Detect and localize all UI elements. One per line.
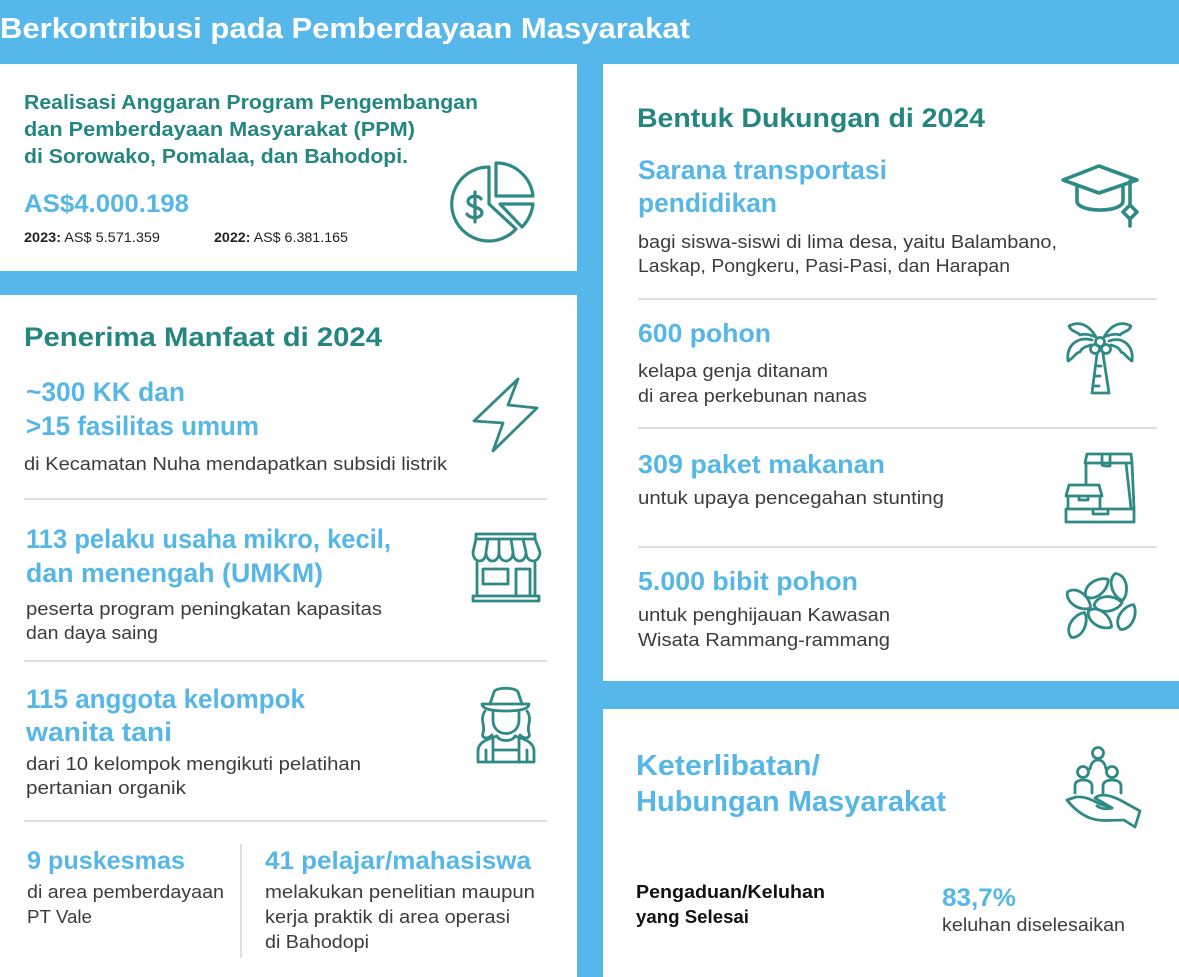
item: women farmer group: 115 anggota kelompok <box>26 684 306 714</box>
item: education transport: bagi siswa-siswi di lima desa, yaitu Balambano, <box>638 232 1057 252</box>
support heading: Bentuk Dukungan di 2024 <box>637 103 985 133</box>
icon: lightning bolt <box>474 379 537 451</box>
item: students research <box>265 847 535 952</box>
engagement heading: Keterlibatan/ <box>636 750 820 782</box>
icon: pie chart with dollar <box>452 163 533 241</box>
item: women farmer group: dari 10 kelompok mengikuti pelatihan <box>26 754 361 774</box>
item: coconut trees: 600 pohon <box>638 318 771 348</box>
item: education transport: pendidikan <box>638 188 777 218</box>
item: food packages: untuk upaya pencegahan stunting <box>638 488 944 508</box>
item: education transport <box>638 155 1057 276</box>
item: students research: 41 pelajar/mahasiswa <box>265 847 532 875</box>
complaints label: Pengaduan/Keluhan <box>636 882 825 902</box>
item: students research: melakukan penelitian maupun <box>265 882 535 902</box>
item: students research: di Bahodopi <box>265 932 369 952</box>
icon: storefront <box>473 534 540 601</box>
budget amount 2024: AS$4.000.198 <box>24 190 189 218</box>
item: health centers: di area pemberdayaan <box>27 882 224 902</box>
item: electricity subsidy: di Kecamatan Nuha mendapatkan subsidi listrik <box>24 454 448 474</box>
item: electricity subsidy <box>24 377 448 474</box>
icon: palm tree <box>1068 324 1132 393</box>
complaints resolved stat: keluhan diselesaikan <box>942 915 1125 935</box>
icon: community in hand <box>1067 748 1140 827</box>
budget heading <box>24 92 478 168</box>
budget heading: dan Pemberdayaan Masyarakat (PPM) <box>24 119 415 141</box>
icon: food boxes <box>1066 454 1134 522</box>
budget heading: di Sorowako, Pomalaa, dan Bahodopi. <box>24 146 408 168</box>
item: health centers: 9 puskesmas <box>27 847 185 875</box>
item: health centers: PT Vale <box>27 907 92 927</box>
item: food packages <box>638 449 944 508</box>
item: coconut trees: di area perkebunan nanas <box>638 386 867 406</box>
complaints label: yang Selesai <box>636 907 749 927</box>
item: education transport: Laskap, Pongkeru, Pasi-Pasi, dan Harapan <box>638 256 1010 276</box>
item: women farmer group: pertanian organik <box>26 778 187 798</box>
item: women farmer group <box>25 684 361 798</box>
complaints resolved stat: 83,7% <box>942 884 1016 912</box>
title: Berkontribusi pada Pemberdayaan Masyarakat <box>0 13 690 45</box>
item: MSME participants: dan daya saing <box>26 623 158 643</box>
icon: woman farmer <box>478 688 534 762</box>
budget 2022: 2022: AS$ 6.381.165 <box>214 229 348 245</box>
item: tree seedlings: 5.000 bibit pohon <box>638 566 858 596</box>
item: electricity subsidy: >15 fasilitas umum <box>26 411 259 441</box>
panel: beneficiaries 2024 <box>0 295 577 977</box>
item: tree seedlings <box>638 566 890 650</box>
engagement heading <box>636 750 946 818</box>
item: education transport: Sarana transportasi <box>638 155 887 185</box>
item: coconut trees <box>638 318 867 406</box>
item: students research: kerja praktik di area operasi <box>265 907 510 927</box>
item: tree seedlings: untuk penghijauan Kawasan <box>638 605 890 625</box>
item: health centers <box>27 847 224 927</box>
item: food packages: 309 paket makanan <box>638 449 885 479</box>
item: MSME participants: peserta program peningkatan kapasitas <box>26 599 382 619</box>
icon: seeds <box>1063 572 1140 641</box>
item: MSME participants: dan menengah (UMKM) <box>26 558 323 588</box>
item: MSME participants <box>26 524 391 643</box>
panel: forms of support 2024 <box>603 64 1179 681</box>
engagement heading: Hubungan Masyarakat <box>636 786 946 818</box>
icon: graduation cap <box>1063 166 1137 226</box>
budget 2023: 2023: AS$ 5.571.359 <box>24 229 160 245</box>
complaints resolved stat <box>942 884 1125 935</box>
item: women farmer group: wanita tani <box>25 717 172 747</box>
budget heading: Realisasi Anggaran Program Pengembangan <box>24 92 478 114</box>
item: tree seedlings: Wisata Rammang-rammang <box>638 630 890 650</box>
item: coconut trees: kelapa genja ditanam <box>638 361 828 381</box>
complaints label <box>636 882 825 927</box>
item: electricity subsidy: ~300 KK dan <box>26 377 185 407</box>
panel: community engagement <box>603 709 1179 977</box>
beneficiaries heading: Penerima Manfaat di 2024 <box>24 322 382 352</box>
panel: budget realization <box>0 64 577 271</box>
item: MSME participants: 113 pelaku usaha mikro, kecil, <box>26 524 391 554</box>
